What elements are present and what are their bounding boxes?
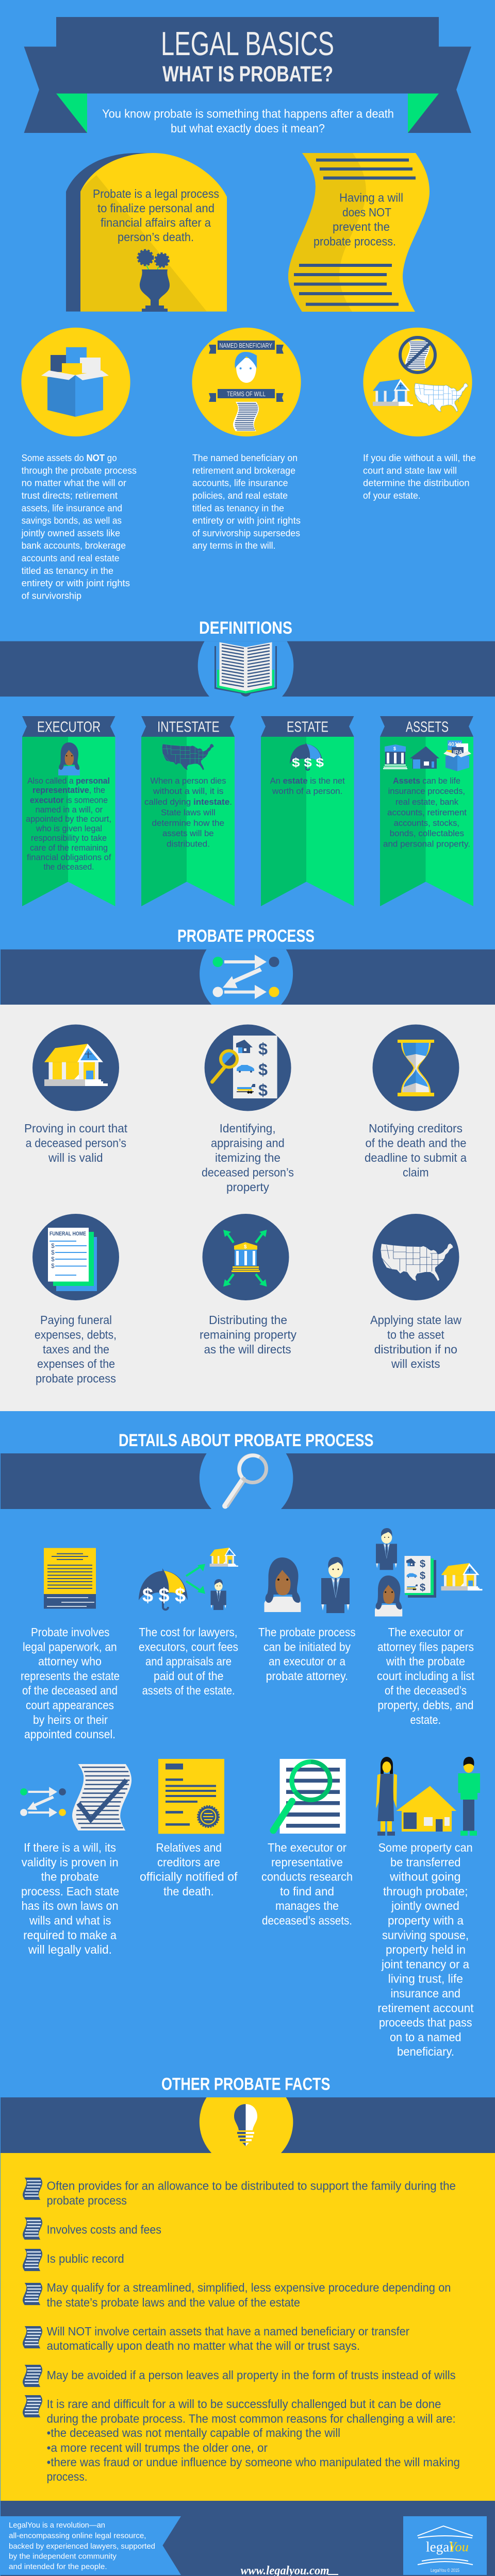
heading: probate process: PROBATE PROCESS <box>177 926 315 946</box>
heading: definitions: DEFINITIONS <box>199 618 292 638</box>
step: proving will in court: Proving in court that <box>24 1122 128 1135</box>
detail: costs paid from estate: and appraisals are <box>145 1655 232 1668</box>
panel: other probate facts background <box>1 2153 495 2501</box>
detail: will validity <box>20 1764 131 1956</box>
step: applying state law <box>370 1214 461 1370</box>
executor text: financial obligations of <box>27 852 111 862</box>
text: assets outside probate: titled as tenancy in the <box>22 565 113 576</box>
step: paying funeral expenses: expenses, debts, <box>35 1328 117 1341</box>
fact: costs and fees <box>23 2217 161 2240</box>
icon: attorney, executor, list and court: $ <box>420 1570 425 1582</box>
text: assets outside probate: of survivorship <box>22 590 81 601</box>
detail: property outside probate <box>376 1757 480 2058</box>
step: identifying property: deceased person’s <box>202 1165 294 1179</box>
step: paying funeral expenses: Paying funeral <box>40 1313 112 1327</box>
executor text: care of the remaining <box>30 843 108 853</box>
fact: avoided with trusts: May be avoided if a person leaves all property in the form of trusts instead of wills <box>47 2368 456 2382</box>
step: proving will in court: will is valid <box>48 1151 103 1164</box>
detail: legal paperwork: attorney who <box>38 1655 102 1668</box>
detail: who initiates probate: The probate process <box>258 1625 356 1639</box>
icon: no will, court and state law <box>363 328 472 436</box>
band: definitions <box>0 641 495 697</box>
text: assets outside probate: Some assets do NOT go <box>22 452 117 463</box>
step: proving will in court: a deceased person’s <box>26 1136 126 1149</box>
text: dying without a will <box>363 452 476 501</box>
detail: costs paid from estate: The cost for lawyers, <box>139 1625 237 1639</box>
heading: assets: ASSETS <box>406 719 449 736</box>
icon: funeral bill: $ <box>51 1249 55 1256</box>
icon: umbrella and dollars: $ $ $ <box>292 756 324 770</box>
intestate text <box>144 776 232 849</box>
detail: will validity: wills and what is <box>29 1913 111 1927</box>
intestate text: without a will, it is <box>153 786 224 796</box>
detail: property outside probate: retirement account <box>377 2001 474 2014</box>
step: identifying property: property <box>226 1180 269 1194</box>
detail: research and manage assets: representative <box>271 1855 343 1869</box>
tombstone text: person’s death. <box>118 230 194 244</box>
icon: retirement box <box>443 740 471 771</box>
assets text: accounts, retirement <box>387 808 467 817</box>
heading: executor: EXECUTOR <box>37 719 101 736</box>
step: paying funeral expenses: expenses of the <box>37 1357 115 1370</box>
detail: property outside probate: proceeds that pass <box>379 2016 472 2029</box>
text: assets outside probate: no matter what the will or <box>22 478 126 488</box>
detail: property outside probate: on to a named <box>390 2030 461 2044</box>
detail: relatives notified: officially notified of <box>140 1870 238 1884</box>
estate text <box>270 776 345 796</box>
detail: property outside probate: without going <box>389 1870 461 1884</box>
detail: relatives notified: the death. <box>163 1885 214 1898</box>
text: named beneficiary: The named beneficiary on <box>192 452 298 463</box>
detail: who initiates probate: probate attorney. <box>266 1669 348 1683</box>
step: notifying creditors: deadline to submit a <box>365 1151 467 1164</box>
intestate text: When a person dies <box>151 776 226 786</box>
detail: legal paperwork: appointed counsel. <box>24 1727 116 1741</box>
icon: umbrella and dollars <box>290 742 324 770</box>
detail: will validity: If there is a will, its <box>24 1841 116 1854</box>
detail: filing papers: attorney files papers <box>377 1640 474 1653</box>
step: proving will in court <box>24 1024 128 1164</box>
detail: will validity: has its own laws on <box>22 1899 119 1912</box>
panel: executor <box>22 716 116 906</box>
icon: named beneficiary and terms of will: NAMED BENEFICIARY <box>220 342 272 349</box>
icon: woman executor <box>58 742 80 775</box>
step: distributing property <box>200 1214 296 1356</box>
logo <box>403 2516 487 2575</box>
text: assets outside probate: savings bonds, as well as <box>22 515 122 526</box>
step: notifying creditors: Notifying creditors <box>369 1122 463 1135</box>
intestate text: distributed. <box>167 839 210 849</box>
step: notifying creditors: claim <box>403 1165 429 1179</box>
detail: legal paperwork: of the deceased and <box>22 1684 118 1697</box>
subtitle: WHAT IS PROBATE? <box>162 62 333 87</box>
detail: filing papers: of the deceased’s <box>385 1684 467 1697</box>
detail: property outside probate: insurance and <box>391 1987 460 2000</box>
fact: costs and fees: Involves costs and fees <box>47 2223 161 2236</box>
icon: process arrows <box>212 955 279 999</box>
icon: attorney, executor, list and court <box>375 1528 482 1617</box>
text: dying without a will: court and state law will <box>363 465 457 476</box>
step: identifying property: $ <box>258 1060 268 1079</box>
fact: challenging a will: It is rare and difficult for a will to be successfully challenged but it can be done <box>47 2397 441 2411</box>
tombstone text: Probate is a legal process <box>93 187 219 200</box>
panel: probate process background <box>0 1005 495 1411</box>
text: named beneficiary: retirement and brokerage <box>192 465 295 476</box>
icon: umbrella, court and lawyer <box>139 1548 238 1610</box>
fact: simplified procedure: May qualify for a streamlined, simplified, less expensive procedure depending on <box>47 2281 451 2294</box>
icon: funeral bill <box>48 1228 97 1291</box>
intro text: but what exactly does it mean? <box>171 122 325 135</box>
text: assets outside probate: trust directs; retirement <box>22 490 118 501</box>
detail: filing papers: with the probate <box>386 1655 465 1668</box>
detail: property outside probate: property with a <box>388 1913 464 1927</box>
text: dying without a will: determine the distribution <box>363 478 470 488</box>
detail: will validity: validity is proven in <box>22 1855 119 1869</box>
step: paying funeral expenses: probate process <box>36 1372 116 1385</box>
text: assets outside probate: assets, life insurance and <box>22 502 122 513</box>
step: applying state law: to the asset <box>387 1328 444 1341</box>
executor text: Also called a personal <box>27 776 110 786</box>
executor text: executor is someone <box>30 795 108 805</box>
step: distributing property: as the will directs <box>204 1343 291 1356</box>
step: applying state law: Applying state law <box>370 1313 461 1327</box>
icon: legal document <box>44 1548 96 1608</box>
detail: legal paperwork: court appearances <box>26 1698 114 1711</box>
step: paying funeral expenses <box>32 1214 119 1385</box>
executor text: named in a will, or <box>36 805 103 815</box>
title: LEGAL BASICS <box>161 25 334 62</box>
step: notifying creditors <box>365 1024 467 1179</box>
detail: property outside probate: through probate; <box>383 1885 468 1898</box>
text: named beneficiary: accounts, life insurance <box>192 478 288 488</box>
detail: legal paperwork <box>21 1548 120 1741</box>
fact: challenging a will: •the deceased was not mentally capable of making the will <box>47 2426 340 2439</box>
intestate text: called dying intestate. <box>144 797 232 807</box>
detail: research and manage assets <box>261 1759 353 1927</box>
detail: property outside probate: jointly owned <box>391 1899 459 1912</box>
tombstone text <box>93 187 219 244</box>
assets text: accounts, stocks, <box>394 818 459 828</box>
footer banner: by the independent community <box>9 2553 117 2561</box>
detail: research and manage assets: The executor or <box>268 1841 346 1854</box>
panel: intestate <box>141 716 235 906</box>
detail: legal paperwork: Probate involves <box>31 1625 109 1639</box>
executor text <box>26 776 111 872</box>
icon: magnifying glass <box>225 1455 266 1507</box>
icon: retirement box: IRA <box>453 750 463 755</box>
intestate text: assets will be <box>162 828 214 838</box>
icon: bank <box>383 744 407 769</box>
footer banner: LegalYou is a revolution—an <box>9 2521 105 2530</box>
will text: Having a will <box>339 191 403 204</box>
detail: property outside probate: joint tenancy or a <box>381 1957 469 1971</box>
detail: filing papers: The executor or <box>388 1625 464 1639</box>
icon: vase with flowers <box>138 250 170 312</box>
footer banner: and intended for the people. <box>9 2563 107 2571</box>
icon: umbrella, court and lawyer: $ $ $ <box>142 1585 186 1606</box>
detail: filing papers: property, debts, and <box>377 1698 473 1711</box>
detail: costs paid from estate: assets of the estate. <box>142 1684 235 1697</box>
will text <box>314 191 403 248</box>
text: dying without a will: of your estate. <box>363 490 421 501</box>
executor text: who is given legal <box>36 823 102 834</box>
step: identifying property: $ <box>258 1040 268 1058</box>
detail: legal paperwork: represents the estate <box>21 1669 120 1683</box>
text: named beneficiary: entirety or with joint rights <box>192 515 301 526</box>
heading: other probate facts: OTHER PROBATE FACTS <box>161 2075 330 2094</box>
detail: costs paid from estate: paid out of the <box>154 1669 224 1683</box>
icon: funeral bill: $ <box>51 1256 55 1263</box>
heading: intestate: INTESTATE <box>157 719 220 736</box>
fact: challenging a will: •a more recent will trumps the older one, or <box>47 2441 268 2454</box>
detail: will validity: the probate <box>41 1870 99 1884</box>
detail: property outside probate: be transferred <box>390 1855 461 1869</box>
step: identifying property: itemizing the <box>215 1151 280 1164</box>
assets text: and personal property. <box>383 839 470 849</box>
step: applying state law: distribution if no <box>374 1343 457 1356</box>
fact: avoided with trusts <box>23 2365 456 2387</box>
fact: challenging a will <box>23 2395 460 2483</box>
icon: funeral bill: $ <box>51 1242 55 1249</box>
icon: couple and house <box>376 1757 480 1836</box>
logo: You <box>449 2539 469 2554</box>
icon: bank: $ <box>393 746 396 751</box>
estate text: worth of a person. <box>272 786 342 796</box>
step: applying state law: will exists <box>391 1357 440 1370</box>
will text: prevent the <box>333 220 390 233</box>
detail: relatives notified: creditors are <box>157 1855 220 1869</box>
detail: filing papers <box>375 1528 482 1726</box>
text: named beneficiary: titled as tenancy in the <box>192 502 284 513</box>
step: paying funeral expenses: taxes and the <box>43 1343 109 1356</box>
fact: challenging a will: •there was fraud or undue influence by someone who manipulated the will making <box>47 2455 460 2469</box>
detail: research and manage assets: to find and <box>280 1885 334 1898</box>
heading: estate: ESTATE <box>287 719 328 736</box>
executor text: representative, the <box>32 785 105 795</box>
detail: will validity: will legally valid. <box>28 1943 112 1956</box>
icon: hourglass <box>398 1040 434 1096</box>
detail: legal paperwork: legal paperwork, an <box>23 1640 117 1653</box>
detail: will validity: required to make a <box>23 1928 117 1942</box>
icon: process and checked will <box>20 1764 131 1831</box>
detail: relatives notified <box>140 1759 238 1898</box>
fact: family allowance: Often provides for an allowance to be distributed to support the family during the <box>47 2179 456 2193</box>
estate text: An estate is the net <box>270 776 345 786</box>
detail: research and manage assets: conducts research <box>261 1870 353 1884</box>
icon: document and magnifier <box>273 1759 345 1834</box>
panel: tombstone <box>66 153 227 312</box>
assets text <box>383 776 470 849</box>
footer banner: all-encompassing online legal resource, <box>9 2532 146 2540</box>
detail: will validity: process. Each state <box>21 1885 119 1898</box>
logo: LegalYou © 2015 <box>431 2568 459 2573</box>
fact: simplified procedure <box>23 2281 451 2309</box>
detail: relatives notified: Relatives and <box>156 1841 222 1854</box>
icon: US map <box>162 744 214 770</box>
assets text: insurance proceeds, <box>388 786 465 796</box>
detail: legal paperwork: by heirs or their <box>33 1713 108 1726</box>
step: distributing property: Distributing the <box>209 1313 287 1327</box>
text: assets outside probate: entirety or with joint rights <box>22 578 130 588</box>
panel: estate <box>261 716 354 906</box>
icon: funeral bill: $ <box>51 1262 55 1269</box>
icon: light bulb <box>234 2104 257 2146</box>
icon: certificate <box>158 1759 224 1834</box>
intestate text: State laws will <box>161 808 216 817</box>
text: assets outside probate: accounts and real estate <box>22 553 119 564</box>
icon: named beneficiary and terms of will <box>192 328 301 436</box>
text: assets outside probate: bank accounts, brokerage <box>22 540 126 551</box>
detail: costs paid from estate: executors, court fees <box>139 1640 238 1653</box>
footer banner: backed by experienced lawyers, supported <box>9 2543 155 2551</box>
step: identifying property: appraising and <box>211 1136 285 1149</box>
step: distributing property: remaining property <box>200 1328 296 1341</box>
text: assets outside probate: jointly owned assets like <box>21 528 120 538</box>
tombstone text: to finalize personal and <box>97 201 214 215</box>
icon: executor and attorney <box>264 1557 350 1613</box>
detail: who initiates probate: can be initiated by <box>263 1640 351 1653</box>
detail: filing papers: estate. <box>410 1713 441 1726</box>
detail: property outside probate: beneficiary. <box>397 2045 454 2058</box>
title banner <box>24 17 471 133</box>
text: named beneficiary <box>192 452 301 551</box>
panel: will scroll <box>288 153 430 312</box>
fact: family allowance <box>23 2178 456 2207</box>
detail: property outside probate: surviving spouse, <box>382 1928 469 1942</box>
detail: filing papers: court including a list <box>377 1669 475 1683</box>
step: identifying property: Identifying, <box>220 1122 276 1135</box>
band: details <box>1 1453 495 1509</box>
icon: funeral bill: FUNERAL HOME <box>50 1231 86 1237</box>
will text: does NOT <box>342 206 391 219</box>
step: notifying creditors: of the death and the <box>365 1136 466 1149</box>
fact: named beneficiary assets: automatically upon death no matter what the will or trust says. <box>47 2339 360 2352</box>
band: probate process <box>1 950 495 1005</box>
text: named beneficiary: of survivorship supersedes <box>192 528 300 538</box>
icon: bank with arrows: $ <box>244 1244 247 1250</box>
intro text: You know probate is something that happens after a death <box>102 107 394 121</box>
executor text: appointed by the court, <box>26 814 111 824</box>
footer banner <box>0 2516 181 2575</box>
detail: costs paid from estate <box>139 1548 238 1697</box>
fact: public record <box>23 2249 124 2271</box>
text: assets outside probate <box>21 452 137 601</box>
fact: challenging a will: during the probate process. The most common reasons for challenging a will are: <box>47 2412 456 2425</box>
executor text: responsibility to take <box>31 833 107 843</box>
heading: details about probate process: DETAILS ABOUT PROBATE PROCESS <box>119 1431 373 1450</box>
icon: attorney, executor, list and court: $ <box>420 1582 425 1594</box>
icon: bank with arrows <box>223 1230 267 1286</box>
detail: property outside probate: property held in <box>386 1943 466 1956</box>
fact: public record: Is public record <box>47 2252 124 2265</box>
text: named beneficiary: policies, and real estate <box>192 490 288 501</box>
fact: simplified procedure: the state’s probate laws and the value of the estate <box>47 2296 300 2309</box>
detail: property outside probate: living trust, life <box>388 1972 463 1986</box>
panel: assets <box>380 716 473 906</box>
text: assets outside probate: through the probate process <box>22 465 137 476</box>
text: named beneficiary: any terms in the will. <box>192 540 276 551</box>
will text: probate process. <box>314 235 396 248</box>
footer <box>0 2501 495 2576</box>
fact: challenging a will: process. <box>47 2470 88 2483</box>
fact: family allowance: probate process <box>47 2194 127 2207</box>
icon: retirement box: 401K <box>448 741 461 748</box>
assets text: bonds, collectables <box>390 828 464 838</box>
assets text: Assets can be life <box>393 776 460 786</box>
tombstone text: financial affairs after a <box>101 216 211 229</box>
detail: who initiates probate: an executor or a <box>269 1655 345 1668</box>
detail: research and manage assets: deceased’s assets. <box>262 1913 352 1927</box>
icon: house <box>410 747 439 769</box>
logo: legal <box>426 2539 453 2555</box>
fact: named beneficiary assets: Will NOT involve certain assets that have a named beneficiary or transfer <box>47 2325 409 2338</box>
fact: named beneficiary assets <box>23 2325 409 2352</box>
icon: named beneficiary and terms of will: TERMS OF WILL <box>227 390 266 398</box>
icon: box of assets <box>21 328 130 436</box>
band: other probate facts <box>1 2097 495 2153</box>
detail: property outside probate: Some property can <box>378 1841 473 1854</box>
assets text: real estate, bank <box>395 797 458 807</box>
icon: open book <box>214 642 277 697</box>
intro text <box>102 107 394 135</box>
icon: attorney, executor, list and court: $ <box>420 1558 425 1570</box>
detail: who initiates probate <box>258 1557 356 1683</box>
step: identifying property: $ <box>258 1081 268 1099</box>
intestate text: determine how the <box>152 818 224 828</box>
detail: research and manage assets: manages the <box>275 1899 339 1912</box>
executor text: the deceased. <box>43 862 94 872</box>
step: identifying property <box>202 1024 294 1194</box>
text: dying without a will: If you die without a will, the <box>363 452 476 463</box>
